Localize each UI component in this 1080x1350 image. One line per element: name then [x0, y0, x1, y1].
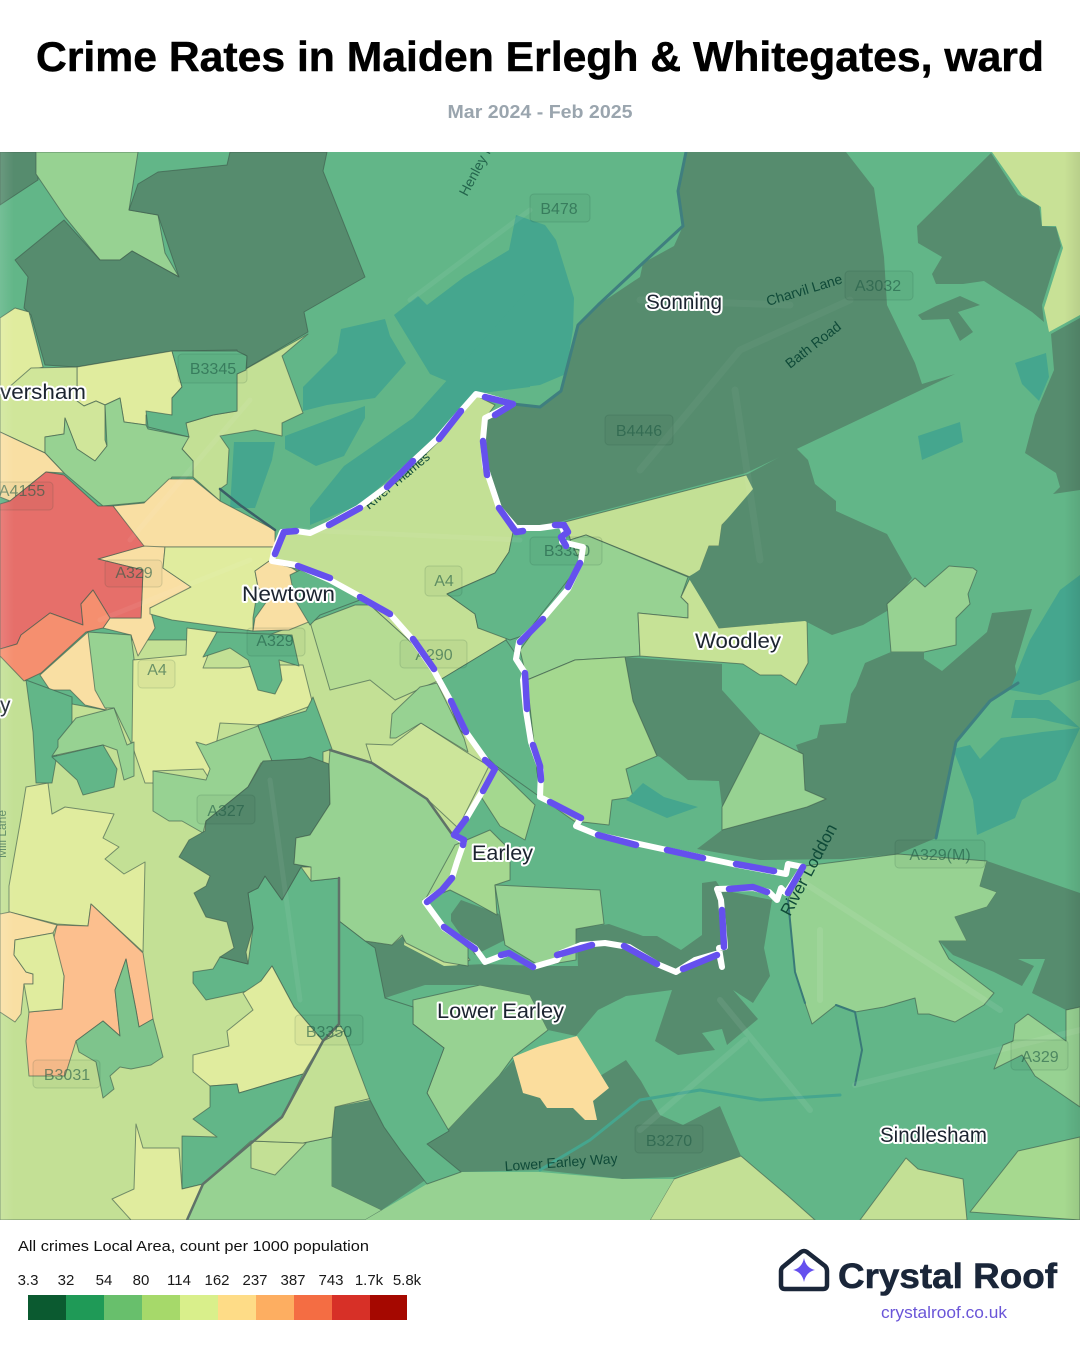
- legend value labels: 32: [58, 1272, 74, 1289]
- legend value labels: 387: [280, 1272, 306, 1289]
- road number labels: A329(M): [909, 847, 971, 864]
- road number labels: B3350: [306, 1024, 352, 1041]
- road number labels: A327: [207, 803, 245, 820]
- legend value labels: [18, 1272, 422, 1289]
- legend value labels: 3.3: [18, 1272, 38, 1289]
- legend value labels: 80: [133, 1272, 149, 1289]
- icon: house with star: [781, 1251, 827, 1289]
- street and river labels: [0, 140, 844, 1174]
- legend value labels: 54: [96, 1272, 112, 1289]
- road number labels: A4: [434, 573, 454, 590]
- road number labels: A329: [1021, 1049, 1059, 1066]
- place names: Lower Earley: [437, 1000, 565, 1023]
- legend colour scale: [28, 1295, 407, 1320]
- place names: Newtown: [242, 583, 335, 606]
- place names: Sindlesham: [880, 1124, 987, 1147]
- legend value labels: 237: [242, 1272, 268, 1289]
- legend title: All crimes Local Area, count per 1000 population: [18, 1238, 369, 1255]
- road number labels: [0, 194, 1068, 1153]
- map edge shading: [0, 152, 1080, 1220]
- road number labels: B3350: [544, 543, 590, 560]
- road number labels: A329: [115, 565, 153, 582]
- place names: [0, 291, 987, 1147]
- place names: Sonning: [646, 291, 722, 314]
- map areas: crime rate regions: [0, 152, 1080, 1220]
- roads and rivers: [100, 152, 1080, 1220]
- street and river labels: Lower Earley Way: [504, 1150, 618, 1174]
- street and river labels: Henley R: [456, 140, 497, 198]
- road number labels: A329: [256, 633, 294, 650]
- title: Crime Rates in Maiden Erlegh & Whitegates, ward: [36, 33, 1044, 80]
- road number labels: A3032: [855, 278, 901, 295]
- road number labels: B3031: [44, 1067, 90, 1084]
- street and river labels: Bath Road: [782, 318, 844, 371]
- road number labels: A4155: [0, 483, 45, 500]
- wordmark: Crystal Roof: [838, 1257, 1057, 1296]
- website: crystalroof.co.uk: [881, 1303, 1008, 1322]
- street and river labels: River Thames: [361, 449, 433, 512]
- road number labels: B3345: [190, 361, 236, 378]
- ward boundary: white line: [272, 394, 803, 972]
- subtitle: date range: Mar 2024 - Feb 2025: [448, 102, 632, 122]
- road number labels: A4: [147, 662, 167, 679]
- choropleth map: [0, 140, 1080, 1220]
- legend value labels: 1.7k: [355, 1272, 384, 1289]
- place names: Earley: [472, 842, 534, 865]
- legend value labels: 114: [167, 1272, 191, 1289]
- street and river labels: River Loddon: [777, 821, 841, 919]
- place names: versham: [0, 381, 86, 404]
- legend value labels: 5.8k: [393, 1272, 422, 1289]
- road number labels: B3270: [646, 1133, 692, 1150]
- place names: Woodley: [695, 630, 782, 653]
- ward boundary: purple dashes: [275, 397, 803, 969]
- legend value labels: 162: [204, 1272, 230, 1289]
- street and river labels: Charvil Lane: [764, 271, 844, 309]
- road number labels: A290: [415, 647, 453, 664]
- road number labels: B4446: [616, 423, 662, 440]
- road number labels: B478: [540, 201, 578, 218]
- legend: [18, 1238, 422, 1320]
- place names: y: [0, 694, 11, 717]
- legend value labels: 743: [318, 1272, 344, 1289]
- logo: Crystal Roof: [781, 1251, 1057, 1322]
